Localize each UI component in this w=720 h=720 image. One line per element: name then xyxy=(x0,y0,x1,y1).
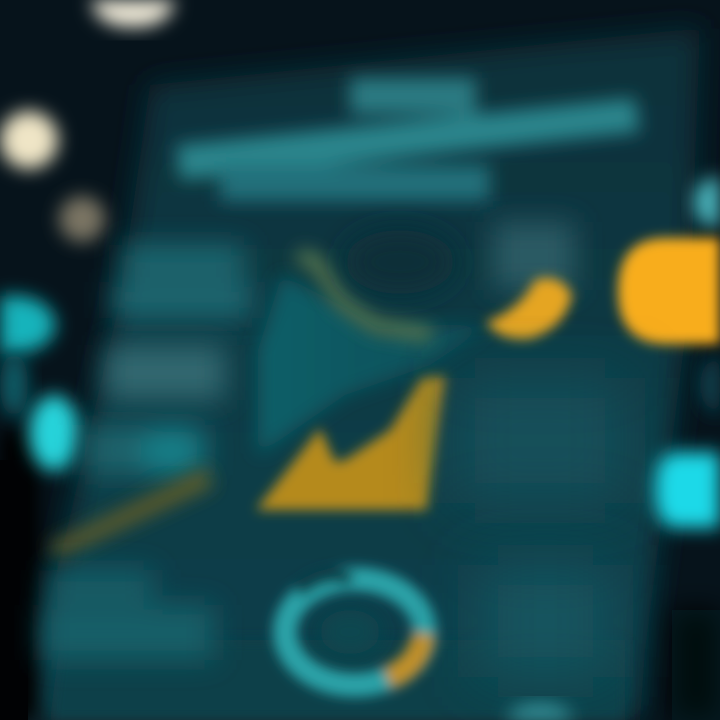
left text block 3 xyxy=(85,425,205,476)
lower right text block xyxy=(478,565,613,677)
left dark side core xyxy=(0,460,28,720)
decorative light: top white xyxy=(91,0,175,27)
teal glow below xyxy=(0,353,28,417)
bottom light accent xyxy=(506,704,574,720)
decorative light: grey xyxy=(59,196,105,242)
left dark side shadow xyxy=(0,430,38,720)
left text block 1 xyxy=(112,245,252,318)
cyan badge xyxy=(655,452,720,528)
donut chart xyxy=(285,576,425,685)
title block xyxy=(176,78,640,201)
decorative light: teal xyxy=(0,296,56,354)
lower left text block xyxy=(42,570,214,660)
area chart: gold xyxy=(256,376,446,510)
large gold badge xyxy=(618,238,720,344)
area chart: teal xyxy=(258,275,490,455)
decorative light: upper right xyxy=(694,176,720,228)
decorative light: cream xyxy=(0,111,58,169)
dark chart gap xyxy=(345,230,455,294)
line chart: olive line xyxy=(298,255,432,335)
right text block 1 xyxy=(455,378,625,503)
teal right accent xyxy=(700,355,720,415)
panel base xyxy=(50,640,625,720)
donut centre xyxy=(320,610,380,654)
diagonal gold line xyxy=(48,468,214,558)
grey top-right card xyxy=(493,222,575,290)
left text block 2 xyxy=(105,345,225,400)
decorative light: cyan xyxy=(29,395,79,471)
lower right dark corner xyxy=(672,610,720,720)
gold pie fragment xyxy=(486,278,572,339)
